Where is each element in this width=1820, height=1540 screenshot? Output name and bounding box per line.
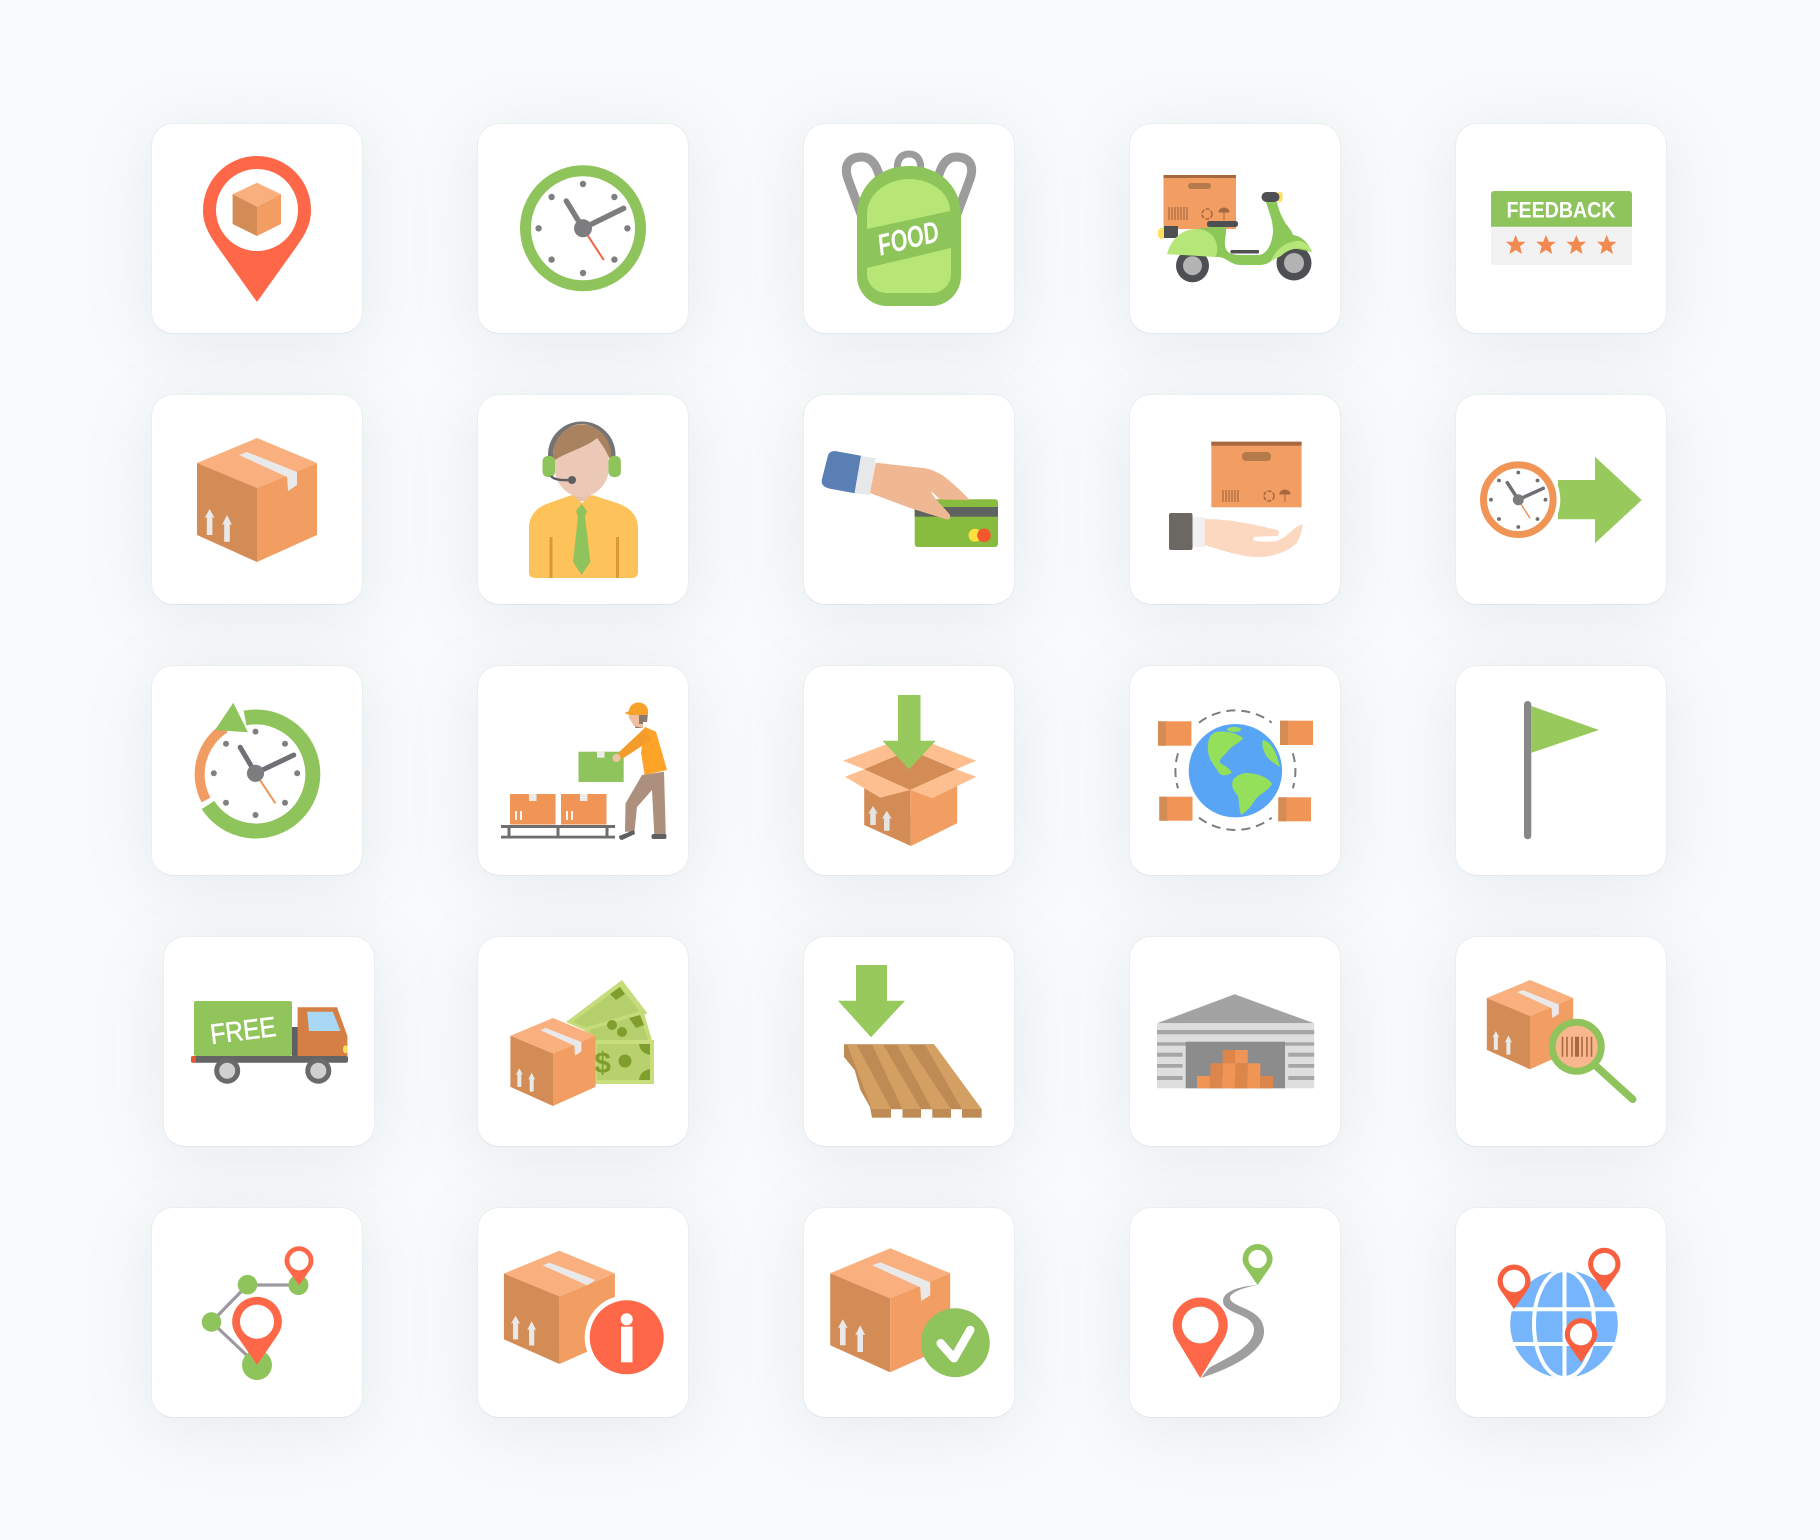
panel: parcel in hand card: [1129, 394, 1341, 605]
icon: warehouse with stacked boxes: [1157, 994, 1314, 1088]
icon: green flag: [1524, 701, 1599, 840]
icon: support agent with headset: [529, 422, 638, 578]
icon: clock with circular arrow: [194, 702, 320, 838]
panel: delivery route card: [1129, 1207, 1341, 1418]
panel: parcel search card: [1455, 936, 1667, 1147]
panel: worldwide shipping card: [1129, 665, 1341, 876]
panel: parcel verified card: [803, 1207, 1015, 1418]
icon: route nodes with pins: [202, 1246, 314, 1380]
icon: clock with arrow: [1480, 456, 1642, 544]
icon: food backpack: FOOD: [874, 215, 942, 262]
icon: arrow onto wooden pallet: [838, 965, 982, 1118]
panel: warehouse worker card: [477, 665, 689, 876]
panel: unboxing card: [803, 665, 1015, 876]
icon: free delivery truck: [191, 1001, 348, 1084]
panel: support agent card: [477, 394, 689, 605]
panel: free delivery truck card: [163, 936, 375, 1147]
panel: clock with circular arrow card: [151, 665, 363, 876]
icon: parcel with banknotes: $: [594, 1047, 611, 1080]
panel: clock card: [477, 123, 689, 334]
panel: food backpack card: [803, 123, 1015, 334]
panel: delivery scooter card: [1129, 123, 1341, 334]
panel: fast delivery card: [1455, 394, 1667, 605]
icon: parcel with check badge: [830, 1248, 990, 1378]
icon: food backpack: [842, 150, 976, 306]
panel: parcel card: [151, 394, 363, 605]
icon: globe surrounded by parcels: [1158, 709, 1313, 831]
panel: feedback card: [1455, 123, 1667, 334]
panel: global locations card: [1455, 1207, 1667, 1418]
icon: worker stacking boxes on pallet: [501, 702, 667, 840]
icon: open box with down arrow: [843, 695, 976, 846]
icon: hand with credit card: [822, 451, 998, 547]
icon: parcel box: [197, 438, 317, 562]
panel: cash on delivery card: [477, 936, 689, 1147]
panel: parcel information card: [477, 1207, 689, 1418]
panel: location pin card: [151, 123, 363, 334]
icon: free delivery truck: FREE: [208, 1011, 278, 1050]
icon: globe with location pins: [1498, 1248, 1620, 1377]
panel: pallet card: [803, 936, 1015, 1147]
icon: hand holding parcel: [1169, 442, 1302, 557]
icon: green wall clock: [520, 165, 646, 292]
icon: parcel with banknotes: [510, 980, 654, 1106]
icon: parcel with magnifier and barcode: [1486, 980, 1636, 1103]
icon: feedback banner with stars: [1491, 191, 1632, 265]
icon: winding road between pins: [1172, 1244, 1273, 1378]
panel: warehouse card: [1129, 936, 1341, 1147]
icon: location pin with parcel: [203, 156, 311, 302]
panel: card payment card: [803, 394, 1015, 605]
icon: delivery scooter with box: [1158, 175, 1312, 282]
panel: flag card: [1455, 665, 1667, 876]
icon: parcel with info badge: [504, 1250, 664, 1374]
panel: route network card: [151, 1207, 363, 1418]
icon: feedback banner with stars: FEEDBACK: [1506, 198, 1616, 222]
